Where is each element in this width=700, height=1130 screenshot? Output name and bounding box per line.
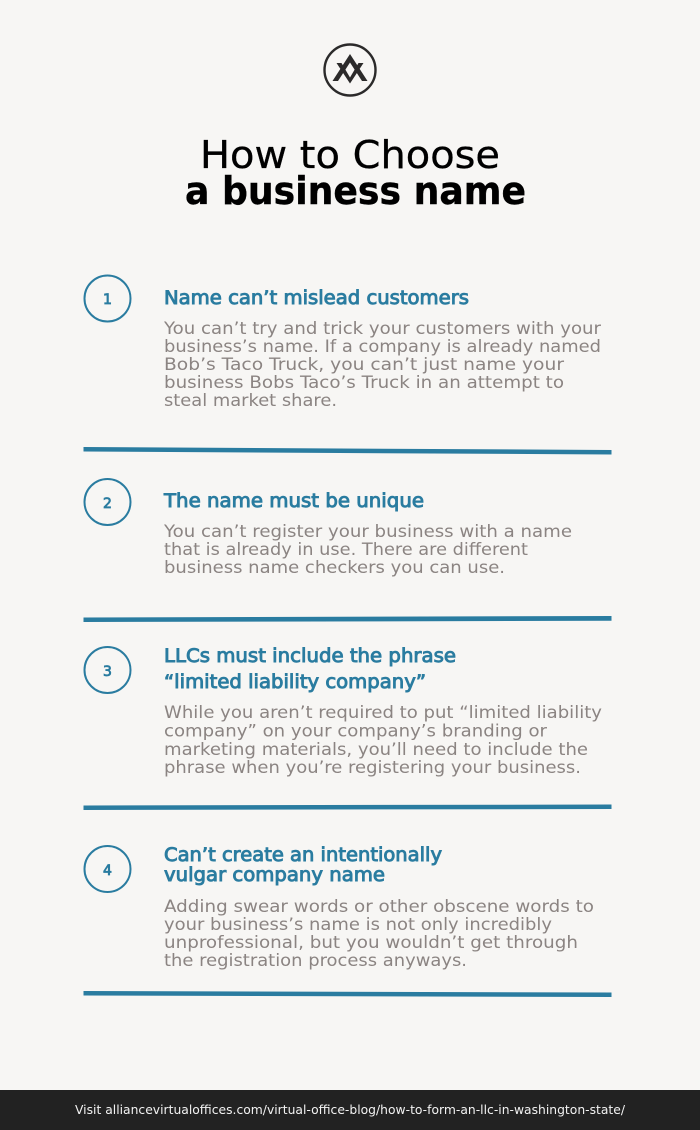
number badge 4 xyxy=(84,846,130,892)
panel: step 2 xyxy=(84,479,572,577)
body 3: marketing materials, you’ll need to include the xyxy=(164,740,588,759)
heading 4: Can’t create an intentionally xyxy=(164,845,442,866)
body 3: While you aren’t required to put “limited liability xyxy=(164,703,602,722)
heading 2: The name must be unique xyxy=(163,491,424,512)
body 3 xyxy=(164,703,602,777)
heading 4 xyxy=(164,845,442,886)
body 3: company” on your company’s branding or xyxy=(164,722,547,740)
body 4: Adding swear words or other obscene words to xyxy=(164,897,594,916)
number badge 1: 1 xyxy=(103,292,112,308)
heading 4: vulgar company name xyxy=(164,865,385,886)
body 1: Bob’s Taco Truck, you can’t just name your xyxy=(164,355,564,374)
body 1 xyxy=(163,319,601,410)
body 1: business Bobs Taco’s Truck in an attempt to xyxy=(164,373,564,392)
body 1: steal market share. xyxy=(164,391,337,410)
panel: step 3 xyxy=(84,646,602,777)
footer link text: Visit alliancevirtualoffices.com/virtual-office-blog/how-to-form-an-llc-in-washington-state/ xyxy=(75,1103,626,1117)
number badge 4: 4 xyxy=(103,863,112,879)
body 2: business name checkers you can use. xyxy=(164,558,505,577)
title: a business name xyxy=(185,169,526,213)
heading 3: “limited liability company” xyxy=(164,672,426,693)
body 2 xyxy=(163,522,572,577)
body 4 xyxy=(164,897,594,970)
body 2: that is already in use. There are different xyxy=(164,540,529,559)
icon: logo xyxy=(324,44,376,96)
number badge 1 xyxy=(84,276,130,322)
body 4: your business’s name is not only incredibly xyxy=(164,915,552,934)
body 1: You can’t try and trick your customers with your xyxy=(163,319,601,338)
panel: step 1 xyxy=(84,276,601,410)
title: How to Choose xyxy=(200,133,500,177)
panel: step 4 xyxy=(84,845,594,970)
heading 3: LLCs must include the phrase xyxy=(164,646,456,667)
number badge 2 xyxy=(84,479,130,525)
body 1: business’s name. If a company is already named xyxy=(164,337,601,356)
body 3: phrase when you’re registering your business. xyxy=(164,758,581,777)
title xyxy=(185,133,526,213)
heading 1: Name can’t mislead customers xyxy=(164,288,469,309)
body 2: You can’t register your business with a name xyxy=(163,522,572,541)
number badge 3 xyxy=(84,647,130,693)
footer bar xyxy=(0,1090,700,1130)
body 4: unprofessional, but you wouldn’t get through xyxy=(164,933,578,952)
heading 3 xyxy=(164,646,456,693)
number badge 2: 2 xyxy=(103,496,112,512)
body 4: the registration process anyways. xyxy=(164,951,467,970)
number badge 3: 3 xyxy=(103,664,112,680)
